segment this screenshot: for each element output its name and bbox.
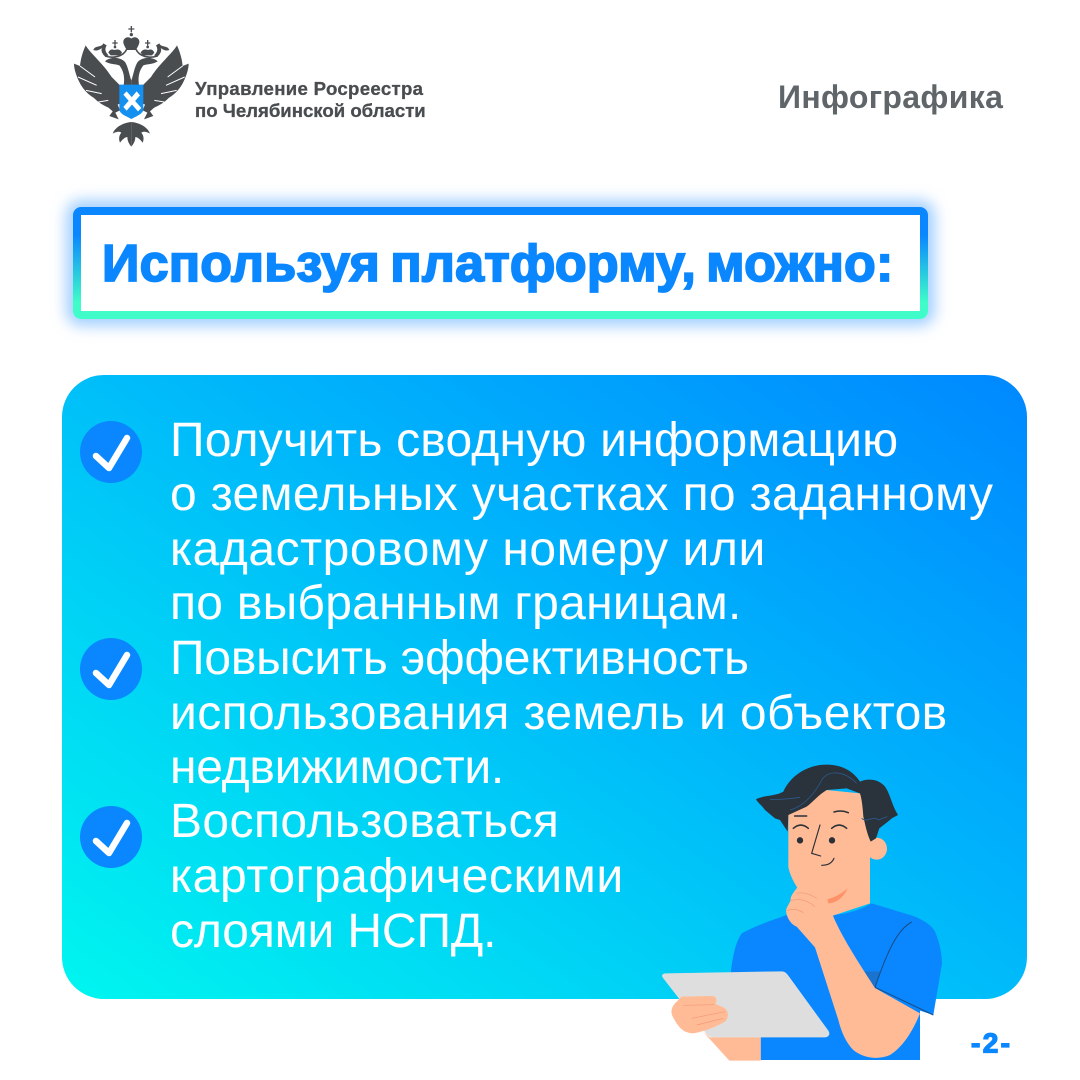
heading text: Используя платформу, можно: <box>102 235 894 293</box>
tablet <box>662 971 829 1037</box>
text block: item 3 <box>170 795 624 958</box>
head <box>756 765 898 917</box>
text block: item 2 <box>170 632 948 794</box>
text block: item 2: использования земель и объектов <box>170 687 948 740</box>
page number: -2- <box>971 1028 1012 1059</box>
panel: gradient background <box>62 375 1027 999</box>
organisation name <box>194 78 426 120</box>
text block: item 3: картографическими <box>170 850 624 903</box>
logo: double-headed eagle emblem <box>74 26 189 146</box>
shirt <box>731 903 942 1060</box>
organisation name: Управление Росреестра <box>195 78 423 99</box>
text block: item 2: Повысить эффективность <box>170 632 749 685</box>
label: infographic: Инфографика <box>778 79 1003 115</box>
shield <box>119 85 143 119</box>
text block: item 1: кадастровому номеру или <box>170 523 766 576</box>
text block: item 1: по выбранным границам. <box>170 577 742 630</box>
organisation name: по Челябинской области <box>195 100 426 120</box>
text block: item 2: недвижимости. <box>170 741 504 794</box>
hair <box>756 765 898 842</box>
icon: check 3 <box>80 806 142 868</box>
text block: item 1: о земельных участках по заданному <box>170 468 993 521</box>
illustration: man with tablet <box>662 764 1012 1061</box>
text block: item 1: Получить сводную информацию <box>170 414 898 467</box>
icon: check 1 <box>80 421 142 483</box>
heading box <box>73 207 928 319</box>
text block: item 3: Воспользоваться <box>170 795 559 848</box>
icon: check 2 <box>80 638 142 700</box>
left hand <box>671 996 761 1061</box>
text block: item 3: слоями НСПД. <box>170 905 496 958</box>
crown <box>123 26 139 50</box>
text block: item 1 <box>170 414 993 630</box>
face details <box>797 837 803 844</box>
arm and hand on chin <box>786 882 920 1058</box>
